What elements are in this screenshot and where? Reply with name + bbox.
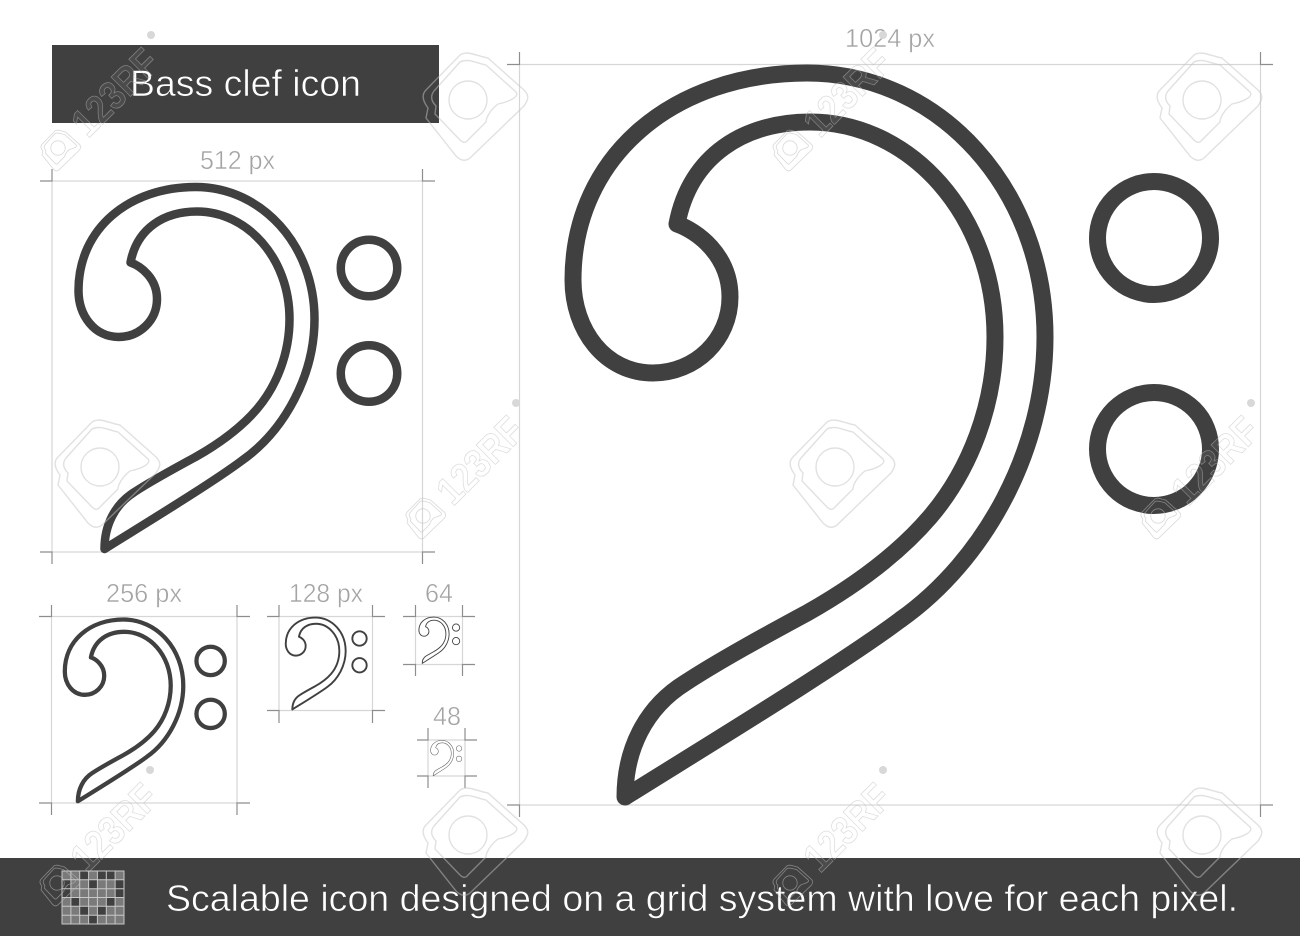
panel: 128 px icon [267,578,385,723]
panel: 256 px icon [39,578,250,815]
size label 48: 48 [433,701,461,731]
size label 1024 px: 1024 px [845,23,935,53]
icon: large bass clef [573,73,1210,797]
watermark: 123RF marks: 123RF [795,41,900,145]
size label 512 px: 512 px [200,145,275,175]
panel: 64 px icon [403,578,475,676]
icon: 48 bass clef [431,740,462,776]
size label 64: 64 [425,578,453,608]
panel: 512 px icon [40,145,435,564]
size label 128 px: 128 px [289,578,363,608]
title text: Bass clef icon [130,63,361,104]
size label 256 px: 256 px [106,578,182,608]
watermark: 123RF marks: 123RF [795,776,900,880]
icon: 512 bass clef [78,187,397,549]
icon: 256 bass clef [65,620,225,801]
watermark: 123RF marks: 123RF [63,41,168,145]
footer text: Scalable icon designed on a grid system with love for each pixel. [166,878,1238,919]
footer bar [0,858,1300,936]
panel: 1024 px icon [507,23,1273,817]
watermark: 123RF marks: 123RF [428,409,533,513]
watermark: 123RF marks: 123RF [62,776,167,880]
title banner [52,45,439,123]
icon: pixel grid [62,871,124,924]
icon: 64 bass clef [419,617,460,663]
watermark: 123RF marks: 123RF [1163,409,1268,513]
icon: 128 bass clef [286,618,367,709]
panel: 48 px icon [417,701,477,788]
